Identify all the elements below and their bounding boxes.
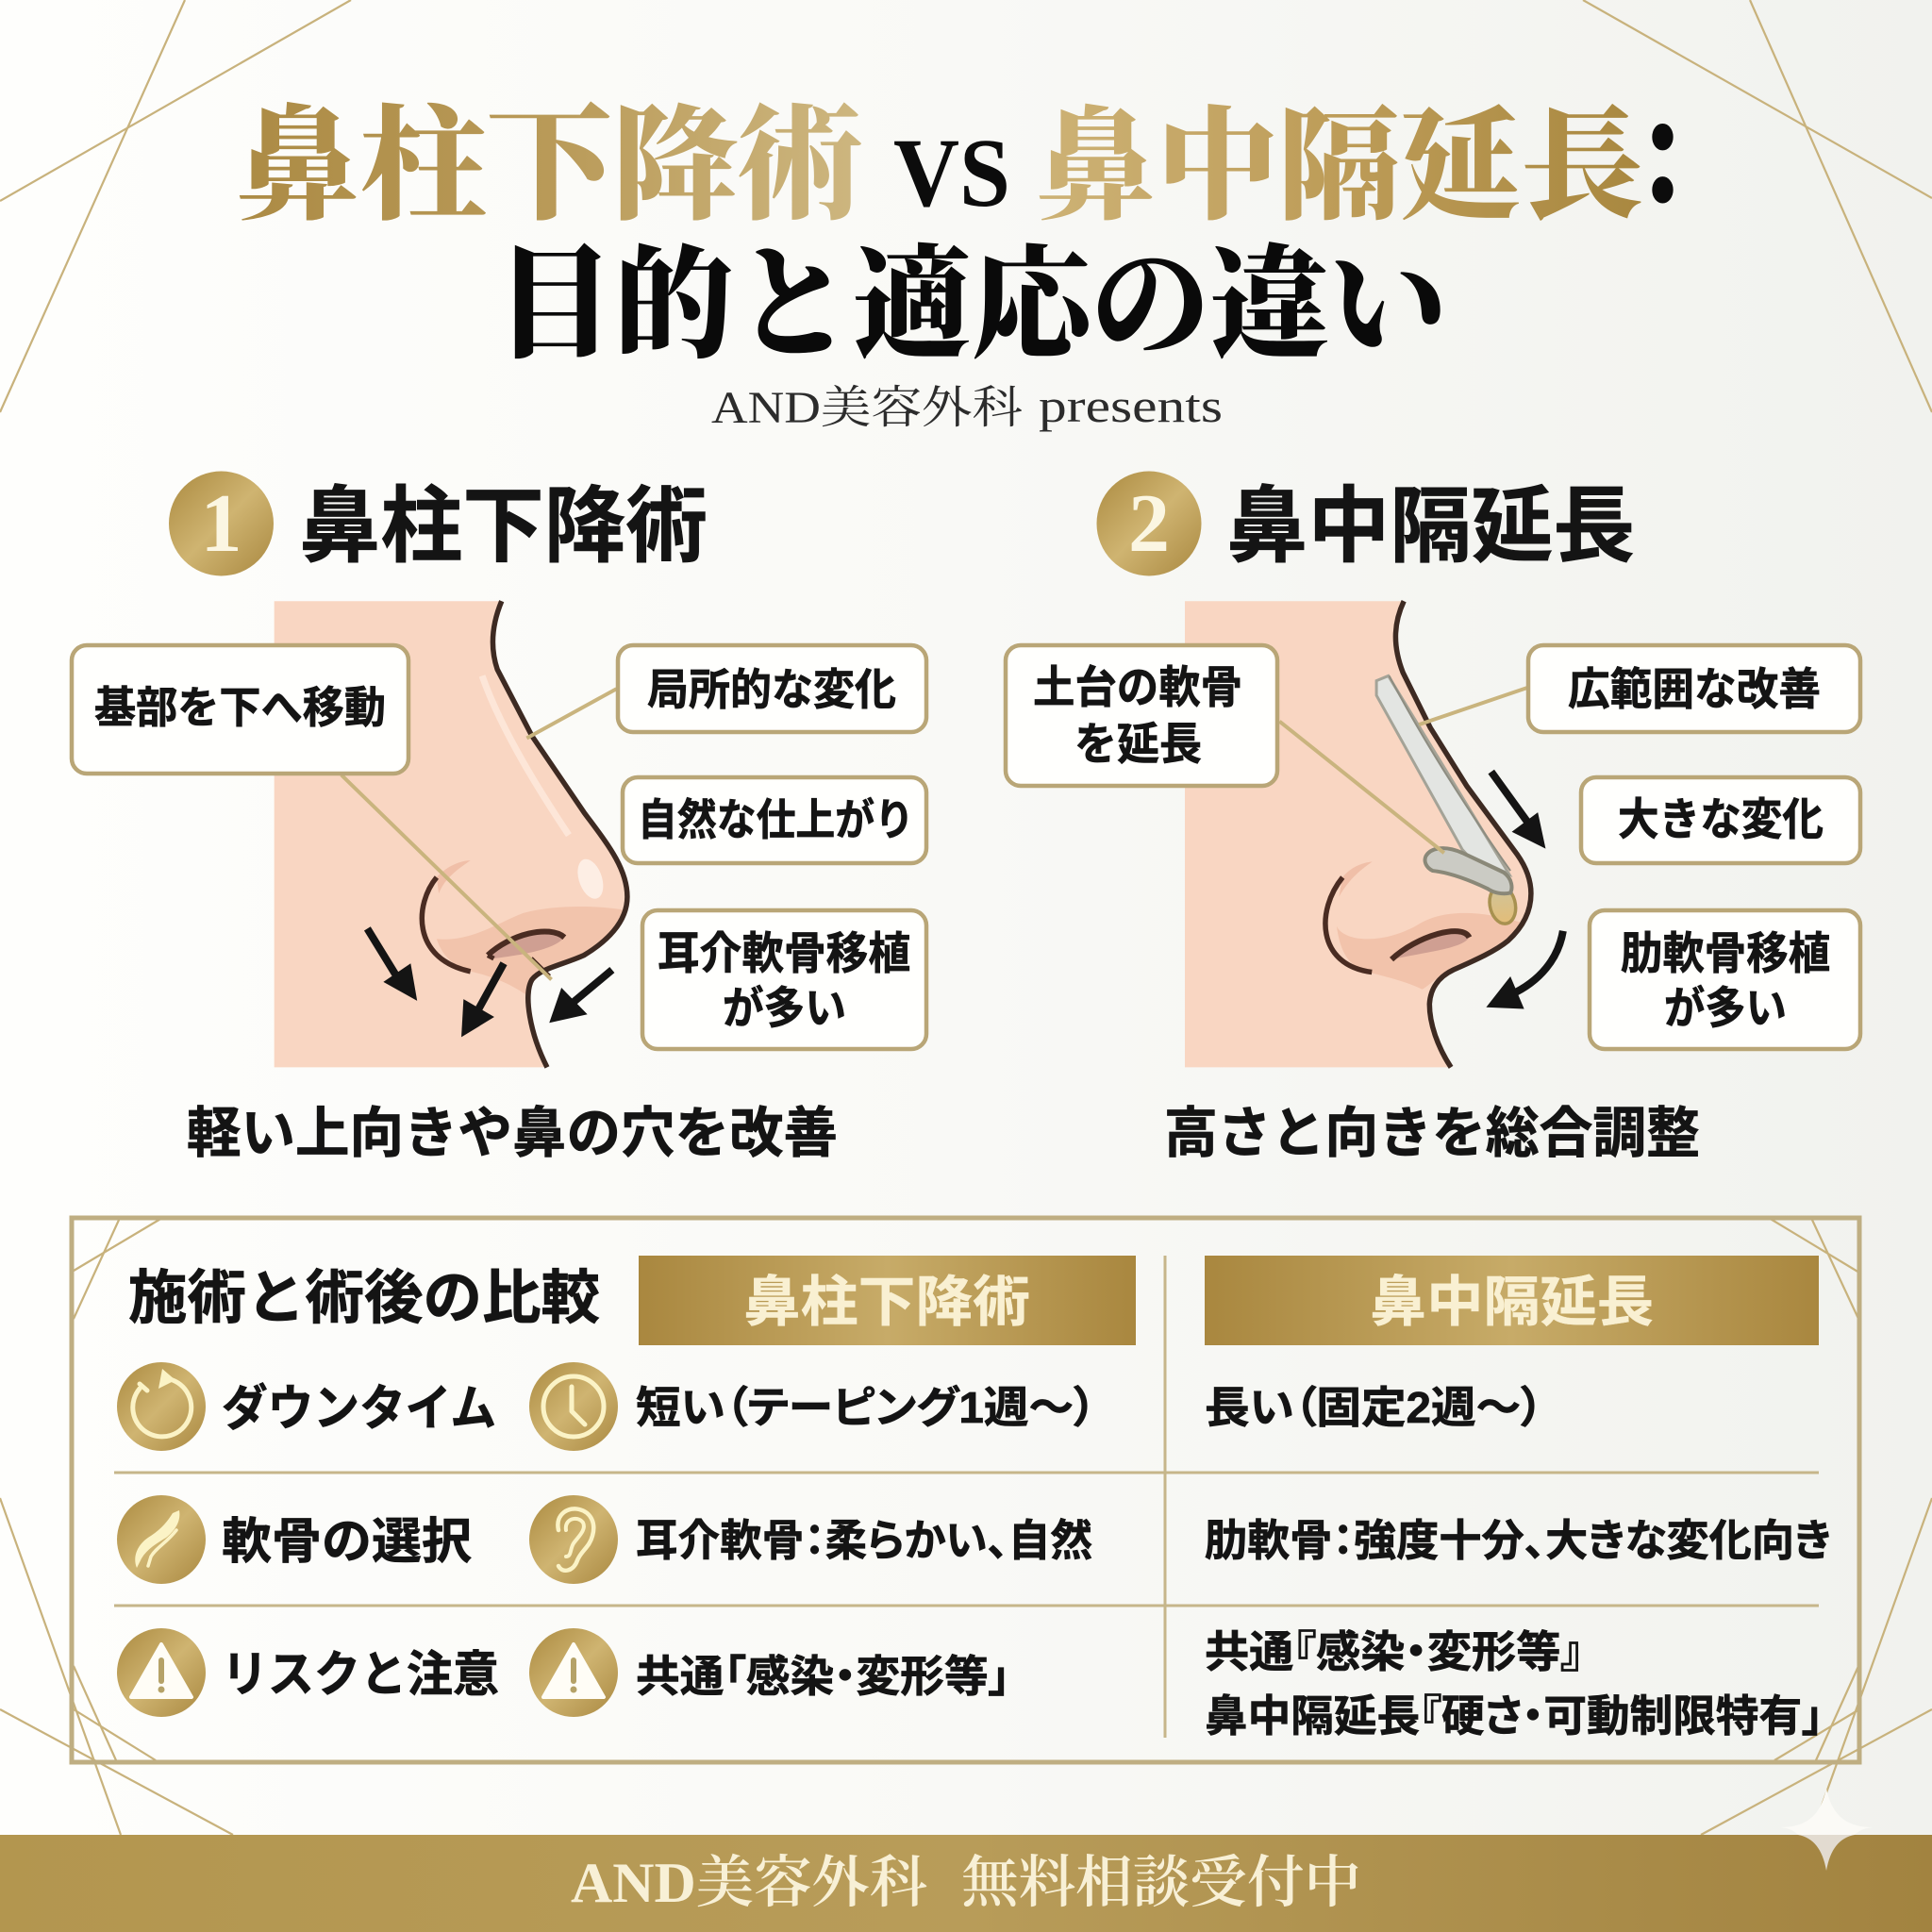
- number badge 1: [169, 472, 274, 575]
- profile line: [1395, 601, 1531, 1067]
- label: 軟骨の選択: [222, 1515, 472, 1570]
- row: cartilage choice: [117, 1495, 1831, 1584]
- alar fold: [1339, 861, 1373, 897]
- icon: warning: [117, 1628, 206, 1717]
- nose illustration 1: [275, 601, 627, 1067]
- row: risks: [117, 1627, 1824, 1740]
- arrow 3: [549, 970, 612, 1023]
- panel frame: [72, 1218, 1859, 1762]
- title line 2: 目的と適応の違い: [495, 239, 1448, 375]
- column header 1: [639, 1256, 1136, 1345]
- number badge 2: 2: [1128, 478, 1170, 570]
- bridge highlight: [482, 675, 569, 835]
- callout: local change: 局所的な変化: [647, 665, 896, 714]
- value column 1: 共通「感染・変形等」: [636, 1652, 1010, 1701]
- value column 2: 共通『感染・変形等』: [1205, 1627, 1583, 1676]
- value column 1: 耳介軟骨：柔らかい、自然: [636, 1516, 1092, 1565]
- panel heading: 施術と術後の比較: [128, 1266, 600, 1331]
- title line 1: 鼻柱下降術: [235, 97, 863, 236]
- icon: clock: [529, 1362, 618, 1451]
- value column 2: [1205, 1627, 1824, 1740]
- value column 1: 短い（テーピング1週〜）: [636, 1383, 1096, 1432]
- row: downtime: [117, 1362, 1543, 1451]
- alar fold: [437, 860, 471, 893]
- comparison panel: [72, 1218, 1859, 1762]
- heading text 2: 鼻中隔延長: [1226, 479, 1635, 573]
- title line 1: :: [1641, 54, 1685, 237]
- section heading 1: [169, 472, 708, 575]
- value column 2: 肋軟骨：強度十分、大きな変化向き: [1205, 1516, 1831, 1565]
- callout: base cartilage extended: 土台の軟骨: [1033, 662, 1242, 712]
- title line 1: 鼻中隔延長: [1035, 100, 1643, 236]
- title: [235, 54, 1685, 375]
- label: ダウンタイム: [222, 1382, 496, 1437]
- icon: ear: [529, 1495, 618, 1584]
- arrow straight: [1491, 772, 1545, 849]
- column header 1: 鼻柱下降術: [743, 1272, 1030, 1333]
- callouts panel 1: [72, 645, 926, 1049]
- icon: recovery ring: [117, 1362, 206, 1451]
- subtitle: AND美容外科: [711, 383, 1023, 433]
- footer text: [571, 1852, 1361, 1914]
- subtitle: presents: [1039, 379, 1223, 432]
- cartilage tip: [1487, 885, 1518, 924]
- callout: ear cartilage: [642, 910, 926, 1049]
- number badge 1: 1: [200, 478, 242, 570]
- column header 2: 鼻中隔延長: [1370, 1272, 1654, 1333]
- heading text 1: 鼻柱下降術: [299, 479, 708, 573]
- callout: base moves down: [72, 645, 408, 774]
- leader lines: [1279, 687, 1528, 853]
- profile line: [492, 601, 627, 1067]
- callout: rib cartilage: 肋軟骨移植: [1621, 928, 1830, 978]
- septal strut: [1376, 675, 1509, 874]
- column header 2: [1205, 1256, 1819, 1345]
- skin: [1185, 601, 1531, 1067]
- callout: rib cartilage: が多い: [1664, 983, 1787, 1033]
- nostril shading: [437, 907, 623, 994]
- callout: rib cartilage: [1590, 910, 1860, 1049]
- callout: big change: [1581, 777, 1860, 863]
- footer text: 無料相談受付中: [961, 1852, 1361, 1914]
- title line 1: VS: [893, 119, 1010, 227]
- nostril shading: [1337, 913, 1522, 990]
- callouts panel 2: [1006, 645, 1860, 1049]
- callout: local change: [618, 645, 926, 732]
- caption 1: 軽い上向きや鼻の穴を改善: [187, 1103, 838, 1164]
- subtitle: [711, 379, 1223, 433]
- section heading 2: [1096, 472, 1635, 575]
- arrow 2: [461, 963, 504, 1037]
- arrow 1: [367, 928, 417, 1001]
- callout: ear cartilage: 耳介軟骨移植: [658, 928, 910, 978]
- caption 2: 高さと向きを総合調整: [1164, 1103, 1700, 1164]
- skin: [275, 601, 627, 1067]
- callout: ear cartilage: が多い: [723, 983, 846, 1033]
- callout: base moves down: 基部を下へ移動: [94, 683, 386, 732]
- value column 2: 鼻中隔延長『硬さ・可動制限特有」: [1205, 1691, 1824, 1740]
- icon: sparkle: [1781, 1789, 1873, 1871]
- nostril: [488, 931, 564, 958]
- alar outline: [1325, 877, 1372, 973]
- alar outline: [422, 877, 471, 972]
- callout: wide improvement: 広範囲な改善: [1568, 664, 1821, 714]
- footer band: [0, 1835, 1932, 1932]
- icon: warning: [529, 1628, 618, 1717]
- extension graft: [1425, 848, 1511, 893]
- footer text: AND美容外科: [571, 1852, 927, 1914]
- callout: base cartilage extended: を延長: [1074, 719, 1202, 769]
- nose illustration 2: [1185, 601, 1563, 1067]
- tip highlight: [574, 858, 608, 901]
- number badge 2: [1096, 472, 1202, 575]
- callout: natural finish: [623, 777, 926, 863]
- title line 1: [235, 54, 1685, 237]
- value column 2: 長い（固定2週〜）: [1205, 1383, 1543, 1432]
- nostril: [1391, 931, 1469, 959]
- callout: base cartilage extended: [1006, 645, 1277, 786]
- leader lines: [341, 689, 616, 979]
- callout: natural finish: 自然な仕上がり: [638, 795, 914, 844]
- label: リスクと注意: [222, 1648, 499, 1703]
- callout: wide improvement: [1528, 645, 1860, 732]
- icon: cartilage: [117, 1495, 206, 1584]
- arrow curved: [1486, 931, 1563, 1008]
- callout: big change: 大きな変化: [1618, 794, 1824, 844]
